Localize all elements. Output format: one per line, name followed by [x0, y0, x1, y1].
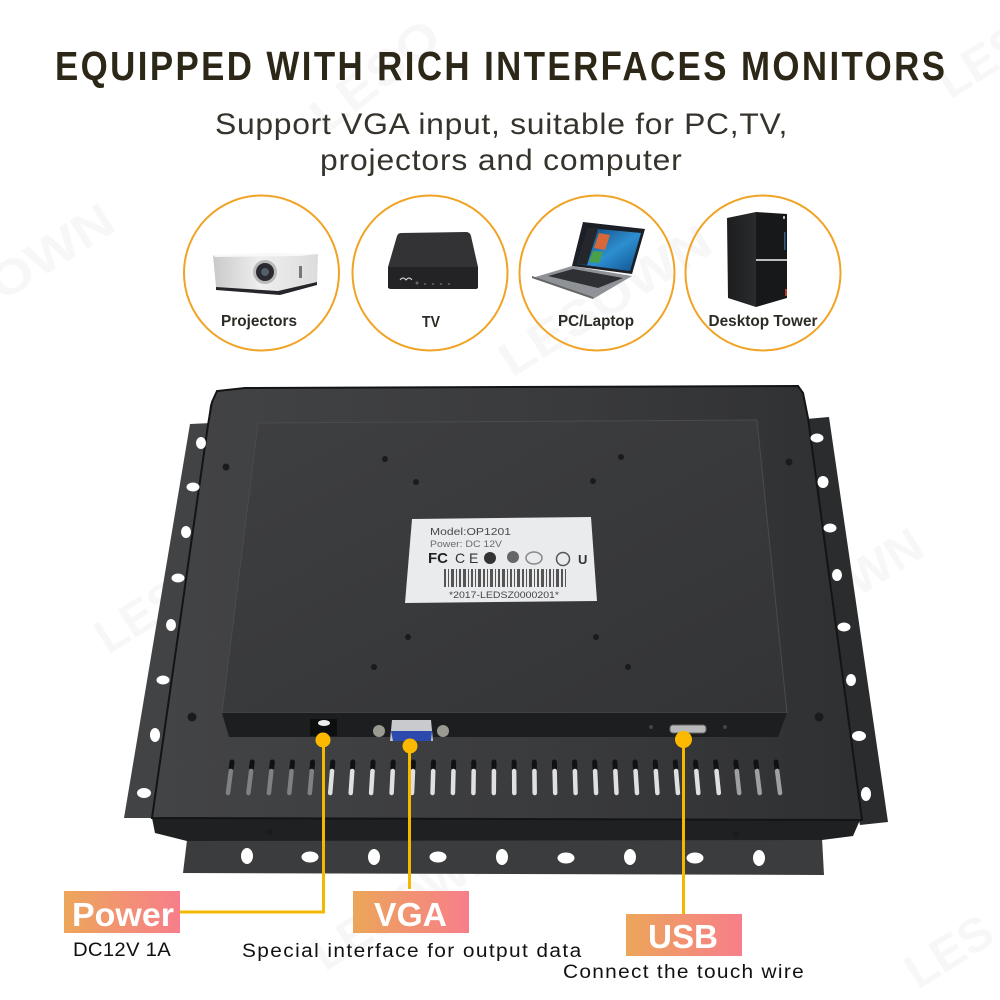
- icon: laptop: [532, 222, 645, 299]
- ventilation slots: [228, 762, 780, 793]
- tag: usb: [626, 914, 742, 956]
- body edge lines: [152, 386, 862, 820]
- subtitle: projectors and computer: [320, 143, 682, 177]
- certification marks: U: [578, 552, 587, 567]
- connector line: power: [180, 740, 324, 912]
- text: vga description: Special interface for output data: [242, 941, 582, 962]
- text: usb description: Connect the touch wire: [563, 962, 804, 983]
- icon: desktop tower: [727, 212, 787, 307]
- vga connector: [373, 720, 449, 741]
- power jack: [310, 719, 337, 736]
- callout: vga: [242, 738, 582, 962]
- monitor back photo: [124, 386, 888, 875]
- barcode: [444, 569, 566, 587]
- watermark: LESO: [300, 10, 451, 144]
- lower flange shoulder: [152, 818, 860, 841]
- label: tv: TV: [422, 314, 441, 331]
- callout: power: [64, 732, 330, 961]
- title: EQUIPPED WITH RICH INTERFACES MONITORS: [55, 44, 945, 90]
- watermark: LESOWN: [723, 518, 933, 677]
- device circle: pc/laptop: [520, 196, 674, 350]
- back plate lower edge: [222, 713, 787, 737]
- connector dot: usb: [675, 731, 692, 748]
- product label sticker: Power: DC 12V: [430, 539, 502, 549]
- product label sticker: Model:OP1201: [430, 526, 511, 538]
- flange holes: [137, 434, 871, 866]
- product label sticker: *2017-LEDSZ0000201*: [449, 590, 559, 601]
- device circle: desktop tower: [686, 196, 840, 350]
- screws and mounting holes: [188, 454, 824, 837]
- left flange: [124, 423, 212, 818]
- certification marks: FC: [428, 550, 448, 567]
- connector dot: vga: [402, 738, 418, 754]
- subtitle: Support VGA input, suitable for PC,TV,: [215, 107, 787, 141]
- back plate: [222, 420, 787, 713]
- usb port: [649, 725, 727, 733]
- subtitle: [215, 107, 787, 177]
- watermark: LESOWN: [303, 825, 509, 981]
- label: projectors: Projectors: [221, 313, 297, 330]
- tag: vga: VGA: [374, 896, 447, 933]
- device circle: projectors: [184, 196, 339, 350]
- icon: tv box: [388, 232, 478, 289]
- connector line: usb: [682, 739, 685, 914]
- connector line: vga: [408, 746, 411, 889]
- tag: vga: [353, 891, 469, 933]
- device circle: tv: [352, 196, 508, 350]
- tag: usb: USB: [648, 918, 718, 955]
- connector dot: power: [316, 732, 330, 748]
- text: power rating: DC12V 1A: [73, 939, 172, 961]
- certification marks: [428, 550, 587, 567]
- label: desktop tower: Desktop Tower: [708, 313, 818, 330]
- lower flange: [183, 838, 824, 875]
- watermark: LES: [896, 905, 1000, 999]
- main body: [152, 386, 862, 820]
- callout: usb: [563, 731, 804, 983]
- certification marks: C E: [455, 550, 478, 566]
- watermark: LESOWN: [490, 215, 721, 387]
- icon: projector: [213, 253, 318, 295]
- product label sticker: [405, 517, 597, 603]
- right flange: [806, 417, 888, 825]
- tag: power: Power: [72, 896, 174, 933]
- watermark: LES: [86, 570, 193, 664]
- label: pc/laptop: PC/Laptop: [558, 313, 634, 330]
